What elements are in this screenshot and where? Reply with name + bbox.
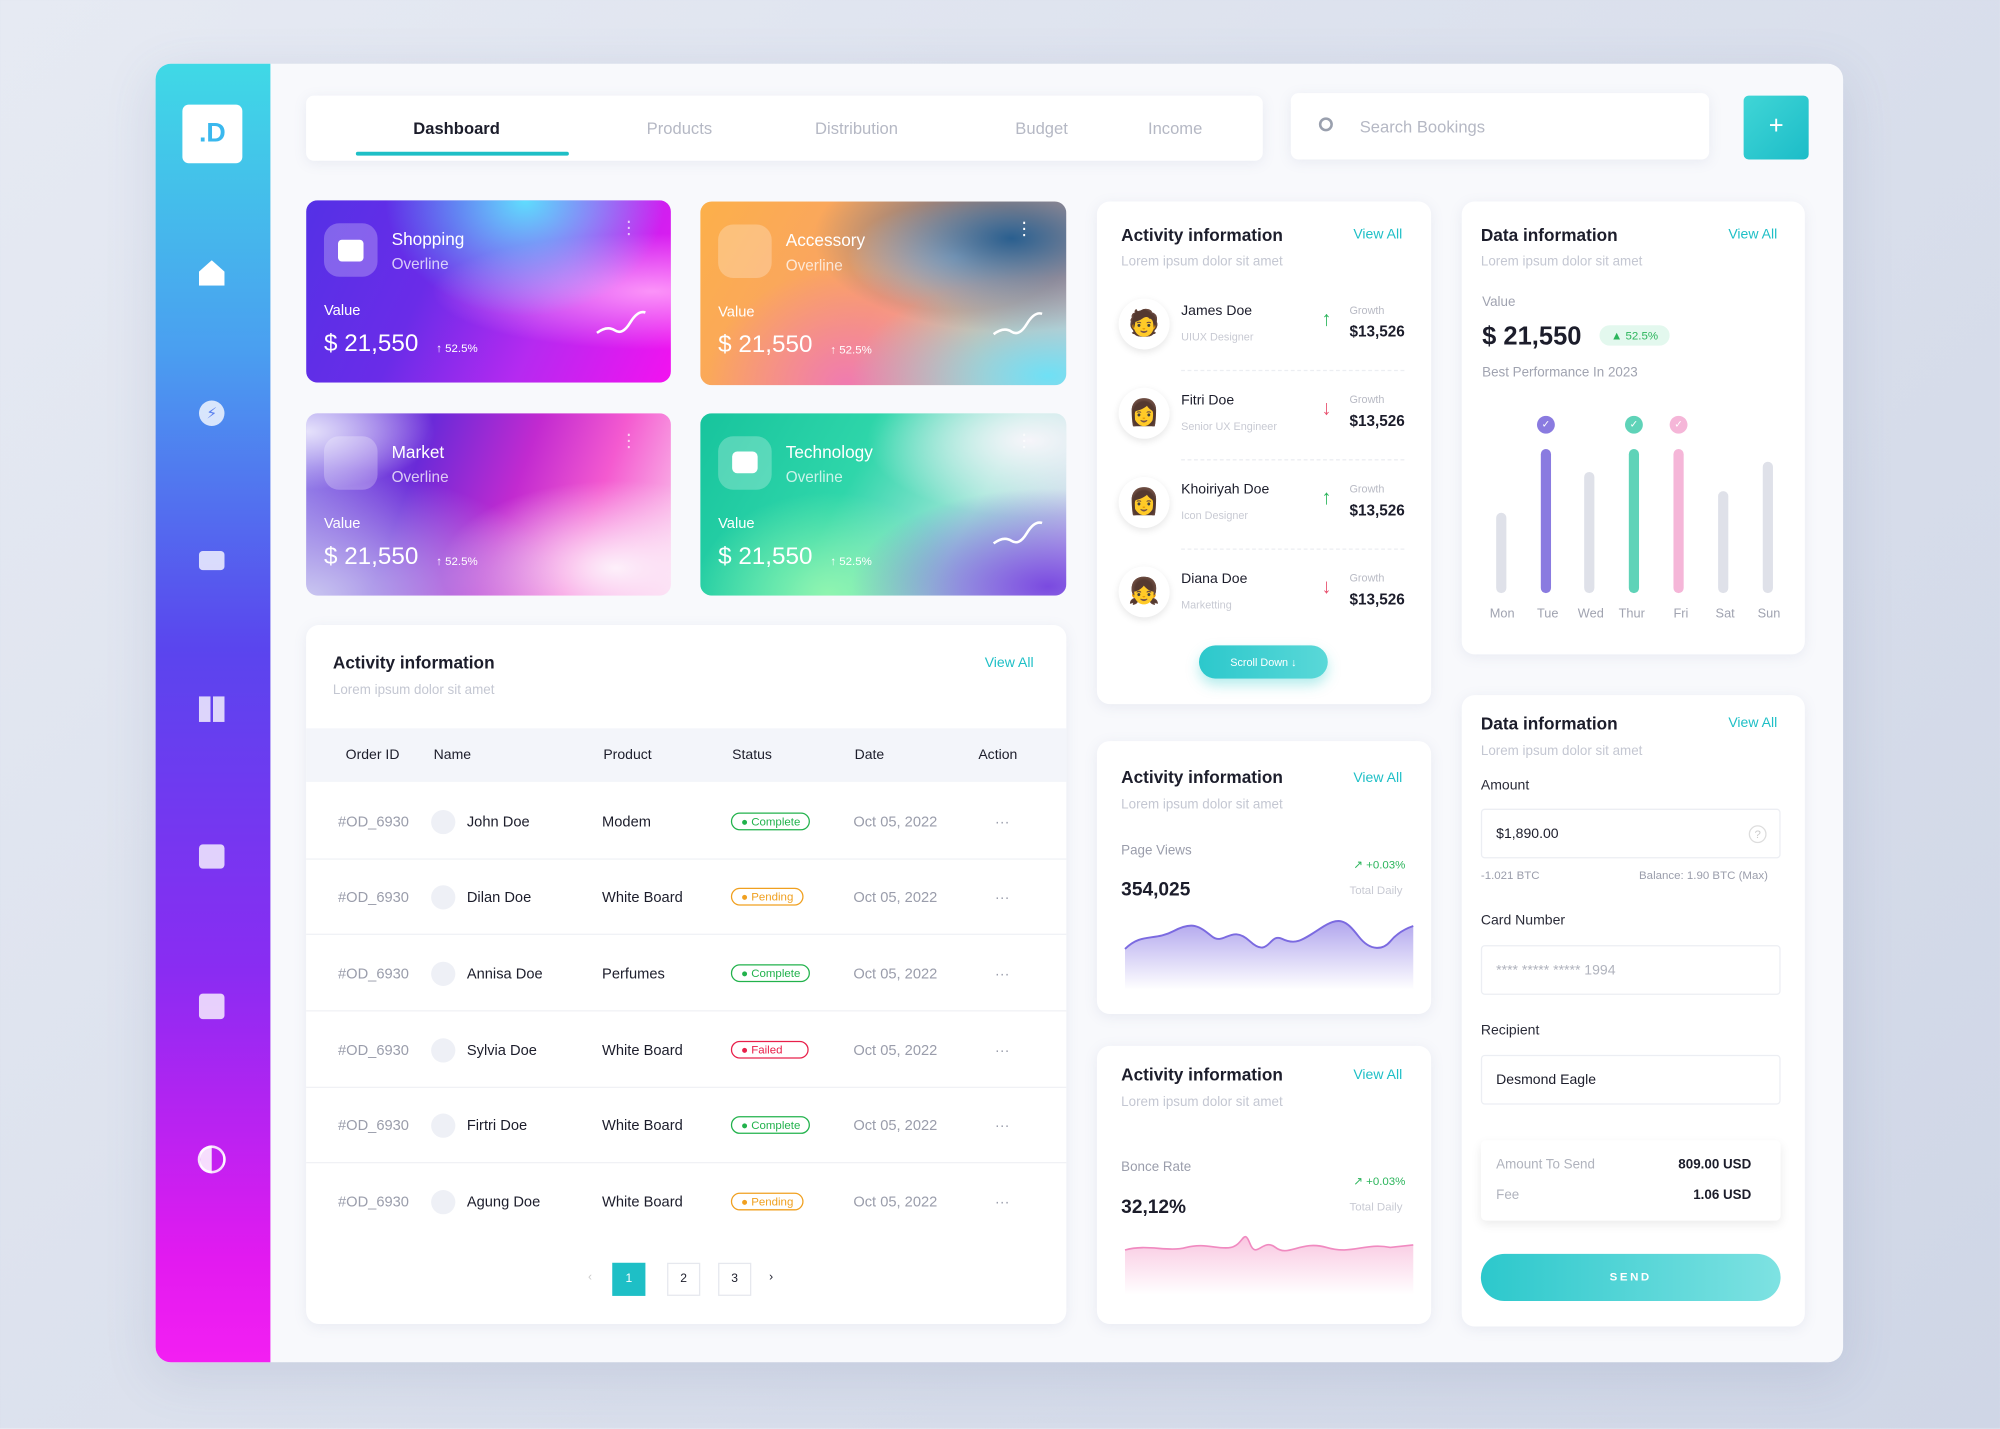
person list: Growth	[1349, 304, 1384, 316]
person list: Marketting	[1181, 598, 1232, 611]
scroll down button	[1199, 645, 1328, 679]
panel: page views: Page Views	[1121, 843, 1192, 858]
card: accessory: $ 21,550	[718, 332, 812, 358]
pagination: 1	[625, 1272, 632, 1286]
table rows: Oct 05, 2022	[853, 890, 937, 906]
table rows: ● Complete	[741, 815, 800, 828]
top navigation tabs: Distribution	[815, 119, 898, 138]
table rows: Oct 05, 2022	[853, 1195, 937, 1210]
person list: Diana Doe	[1181, 571, 1247, 587]
pagination: 3	[731, 1272, 738, 1286]
panel: data information bar chart: Value	[1482, 295, 1515, 310]
person list: Senior UX Engineer	[1181, 420, 1277, 432]
bar chart: Thur	[1619, 607, 1645, 621]
add button	[1744, 96, 1809, 159]
person list: 👩	[1128, 489, 1160, 517]
panel: activity people: View All	[1353, 227, 1402, 242]
person list: ↓	[1321, 398, 1332, 420]
person list: ↓	[1321, 577, 1332, 598]
sidebar	[156, 64, 270, 1362]
card: technology	[700, 413, 1066, 596]
panel: bounce rate: ↗ +0.03%	[1353, 1175, 1405, 1187]
table header	[306, 728, 1066, 782]
card: technology: Value	[718, 517, 755, 532]
card: accessory: Accessory	[786, 231, 865, 250]
panel: data information form: View All	[1728, 716, 1777, 731]
panel: data information bar chart: Data information	[1481, 226, 1618, 245]
table rows: White Board	[602, 1119, 683, 1134]
panel: data information form: Recipient	[1481, 1023, 1539, 1038]
table rows: ● Complete	[741, 967, 800, 980]
card: accessory: ↑ 52.5%	[830, 343, 872, 356]
table rows: ···	[995, 890, 1010, 906]
card: accessory	[700, 202, 1066, 385]
table rows: ● Failed	[741, 1043, 782, 1056]
panel: data information bar chart: Lorem ipsum dolor sit amet	[1481, 254, 1642, 269]
person list: $13,526	[1349, 323, 1405, 341]
table rows: Sylvia Doe	[467, 1043, 537, 1059]
summary box: 1.06 USD	[1693, 1187, 1751, 1203]
panel: page views: ↗ +0.03%	[1353, 858, 1405, 871]
person list: $13,526	[1349, 501, 1405, 519]
table header: Order ID	[346, 747, 399, 763]
icon: lightning	[199, 401, 224, 426]
summary box	[1481, 1140, 1781, 1221]
person list: Khoiriyah Doe	[1181, 482, 1269, 497]
person list: Growth	[1349, 393, 1384, 406]
person list: Growth	[1349, 482, 1384, 495]
table rows: Modem	[602, 815, 651, 830]
logo	[182, 105, 242, 163]
panel: data information form: Data information	[1481, 714, 1618, 733]
icon: contrast	[198, 1145, 226, 1173]
table rows: Firtri Doe	[467, 1119, 527, 1134]
panel: bounce rate: Activity information	[1121, 1065, 1283, 1084]
card: technology: Overline	[786, 468, 843, 486]
search bar: Search Bookings	[1360, 117, 1485, 136]
panel: orders table: View All	[985, 656, 1034, 671]
table rows: #OD_6930	[338, 1195, 409, 1210]
person list	[1118, 304, 1405, 621]
card: market: Market	[392, 443, 444, 462]
panel: data information form: Card Number	[1481, 913, 1565, 929]
add button: +	[1769, 112, 1784, 140]
amount input: ?	[1754, 828, 1761, 841]
panel: activity people: Lorem ipsum dolor sit amet	[1121, 254, 1283, 269]
table rows: ···	[995, 967, 1010, 982]
panel: data information bar chart: Best Performance In 2023	[1482, 365, 1638, 380]
card: technology: Technology	[786, 443, 873, 462]
card: shopping: Value	[324, 304, 360, 319]
search bar	[1291, 93, 1709, 159]
area chart: bounce rate	[1124, 1236, 1414, 1286]
card: accessory: ⋮	[1015, 218, 1033, 239]
card: market: ↑ 52.5%	[436, 555, 478, 568]
panel: orders table: Lorem ipsum dolor sit amet	[333, 682, 494, 698]
pagination: ‹	[588, 1270, 592, 1284]
panel: data information form	[1462, 695, 1805, 1327]
card: technology: $ 21,550	[718, 543, 812, 570]
person list: Fitri Doe	[1181, 393, 1234, 408]
table header: Product	[603, 747, 652, 763]
card: accessory: Value	[718, 305, 755, 320]
panel: bounce rate: Bonce Rate	[1121, 1159, 1191, 1175]
pagination	[588, 1262, 773, 1296]
panel: page views: Total Daily	[1349, 884, 1402, 897]
icon: home	[199, 260, 224, 286]
panel: orders table	[306, 625, 1066, 1324]
card: shopping: Shopping	[392, 230, 464, 249]
card number input	[1481, 945, 1781, 995]
panel: page views: Lorem ipsum dolor sit amet	[1121, 797, 1283, 812]
person list: $13,526	[1349, 412, 1405, 430]
summary box: 809.00 USD	[1678, 1157, 1751, 1172]
panel: data information bar chart: $ 21,550	[1482, 323, 1581, 351]
bar chart: ✓	[1674, 418, 1683, 430]
bar chart: ✓	[1630, 418, 1638, 430]
table rows: ···	[995, 1195, 1010, 1210]
icon: grid	[199, 696, 224, 722]
person list: ↑	[1321, 487, 1332, 509]
table rows: ···	[995, 1119, 1010, 1134]
panel: data information form: Amount	[1481, 778, 1529, 793]
pagination: 2	[680, 1272, 687, 1286]
area chart: page views	[1124, 920, 1414, 984]
table rows: Agung Doe	[467, 1195, 540, 1210]
table rows: White Board	[602, 890, 683, 906]
table rows: ● Complete	[741, 1119, 800, 1131]
panel: data information bar chart: View All	[1728, 227, 1777, 242]
icon: archive	[199, 844, 224, 869]
panel: activity people	[1097, 202, 1431, 704]
person list: James Doe	[1181, 304, 1252, 319]
bar chart: Fri	[1673, 607, 1688, 621]
person list: 👧	[1128, 578, 1160, 606]
top navigation tabs: Dashboard	[413, 119, 500, 138]
person list: 👩	[1128, 399, 1160, 427]
card: shopping: $ 21,550	[324, 330, 418, 357]
icon: contact	[199, 994, 224, 1019]
card: market: ⋮	[620, 430, 638, 450]
person list: Growth	[1349, 571, 1384, 584]
table rows: #OD_6930	[338, 815, 409, 830]
table rows: White Board	[602, 1043, 683, 1059]
panel: page views	[1097, 741, 1431, 1014]
table rows: Oct 05, 2022	[853, 1119, 937, 1134]
card: technology: ⋮	[1015, 430, 1033, 450]
table header: Action	[978, 747, 1017, 763]
bar chart	[1490, 416, 1780, 621]
table rows: Oct 05, 2022	[853, 967, 937, 982]
card: shopping: ↑ 52.5%	[436, 342, 478, 355]
panel: orders table: Activity information	[333, 653, 495, 672]
bar chart: ✓	[1542, 418, 1550, 430]
table rows: Annisa Doe	[467, 967, 543, 982]
bar chart: Mon	[1490, 607, 1515, 621]
panel: data information form: -1.021 BTC	[1481, 869, 1540, 881]
panel: data information bar chart: ▲ 52.5%	[1611, 329, 1658, 342]
bar chart: Sat	[1716, 607, 1735, 621]
table header: Status	[732, 747, 772, 763]
table rows: Oct 05, 2022	[853, 1043, 937, 1059]
panel: page views: 354,025	[1121, 879, 1190, 901]
panel: activity people: Activity information	[1121, 226, 1283, 245]
card: technology: ↑ 52.5%	[830, 555, 872, 568]
table rows: Perfumes	[602, 967, 665, 982]
table rows: #OD_6930	[338, 1043, 409, 1059]
table rows: ···	[995, 1043, 1010, 1059]
panel: data information form: Lorem ipsum dolor sit amet	[1481, 744, 1642, 759]
panel: bounce rate: 32,12%	[1121, 1196, 1186, 1218]
top navigation tabs: Budget	[1015, 119, 1068, 138]
top navigation tabs	[306, 96, 1263, 161]
panel: data information form: Balance: 1.90 BTC (Max)	[1639, 869, 1768, 881]
table header: Date	[855, 747, 884, 763]
table header: Name	[434, 747, 471, 763]
summary box: Amount To Send	[1496, 1157, 1595, 1172]
table rows: White Board	[602, 1195, 683, 1210]
card: market: Overline	[392, 468, 449, 486]
table rows	[306, 810, 1066, 1214]
top navigation tabs: Income	[1148, 119, 1202, 138]
amount input	[1481, 809, 1781, 858]
logo: .D	[199, 119, 226, 148]
card: market: $ 21,550	[324, 543, 418, 570]
card: shopping: ⋮	[620, 217, 638, 237]
recipient input: Desmond Eagle	[1496, 1073, 1596, 1088]
recipient input	[1481, 1055, 1781, 1105]
panel: bounce rate: Total Daily	[1349, 1200, 1402, 1213]
scroll down button: Scroll Down ↓	[1230, 656, 1297, 668]
card: shopping: Overline	[392, 255, 449, 273]
table rows: John Doe	[467, 815, 530, 830]
icon: lightning: ⚡	[206, 404, 217, 422]
panel: bounce rate: View All	[1353, 1068, 1402, 1083]
top navigation tabs: Products	[647, 119, 712, 138]
summary box: Fee	[1496, 1187, 1519, 1203]
table rows: ● Pending	[741, 1195, 793, 1208]
main dashboard frame	[156, 64, 1843, 1362]
amount input: $1,890.00	[1496, 827, 1559, 842]
table rows: Oct 05, 2022	[853, 815, 937, 830]
table rows: #OD_6930	[338, 890, 409, 906]
table rows: Dilan Doe	[467, 890, 531, 906]
table rows: #OD_6930	[338, 967, 409, 982]
panel: page views: View All	[1353, 770, 1402, 786]
panel: bounce rate: Lorem ipsum dolor sit amet	[1121, 1094, 1283, 1110]
table rows: ● Pending	[741, 890, 793, 903]
card: accessory: Overline	[786, 256, 843, 274]
person list: ↑	[1321, 309, 1332, 330]
panel: bounce rate	[1097, 1046, 1431, 1324]
card: market: Value	[324, 517, 360, 532]
bar chart: Wed	[1578, 607, 1604, 621]
send button: SEND	[1610, 1270, 1652, 1283]
person list: Icon Designer	[1181, 509, 1248, 522]
pagination: ›	[769, 1270, 773, 1284]
table rows: ···	[995, 815, 1010, 830]
card number input: **** ***** ***** 1994	[1496, 963, 1616, 978]
bar chart: Sun	[1758, 607, 1780, 621]
person list: $13,526	[1349, 591, 1405, 608]
send button	[1481, 1254, 1781, 1301]
bar chart: Tue	[1537, 607, 1559, 621]
card: shopping	[306, 200, 671, 383]
person list: UIUX Designer	[1181, 330, 1253, 343]
icon: card	[199, 551, 224, 570]
panel: page views: Activity information	[1121, 768, 1283, 787]
table rows: #OD_6930	[338, 1119, 409, 1134]
panel: data information bar chart	[1462, 202, 1805, 654]
card: market	[306, 413, 671, 596]
person list: 🧑	[1128, 310, 1160, 338]
